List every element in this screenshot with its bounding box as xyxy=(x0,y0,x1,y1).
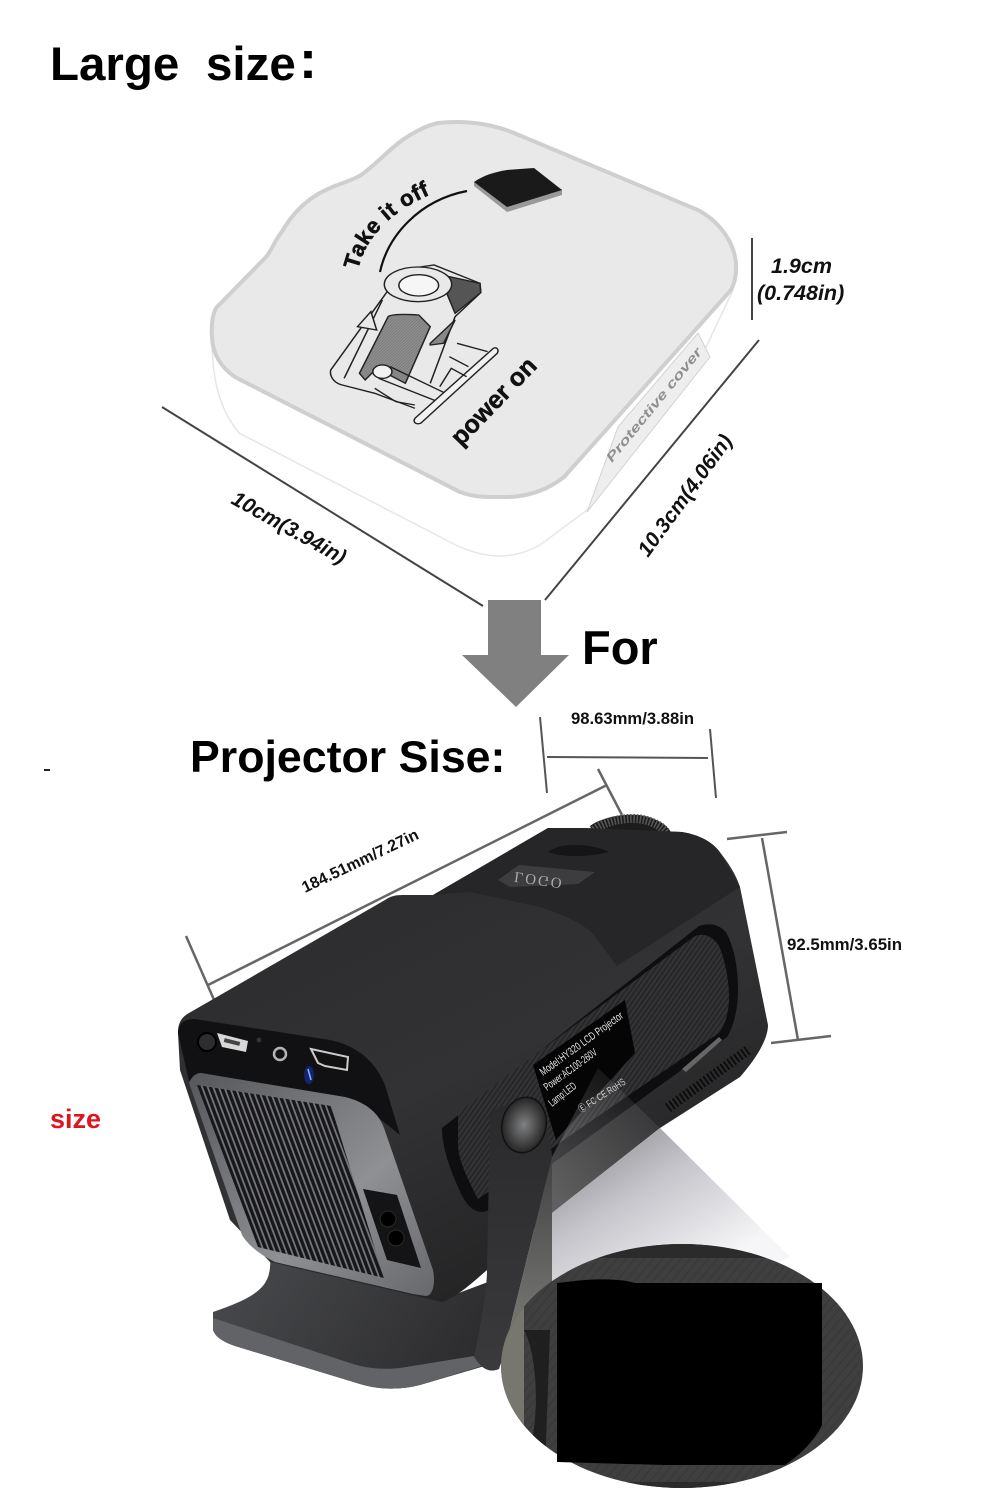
dimension: cover depth: 10.3cm(4.06in) xyxy=(633,430,737,561)
focus flap xyxy=(548,845,609,856)
light cone over body xyxy=(552,1068,660,1213)
spec label: Power:AC100-260V xyxy=(542,1046,600,1093)
dimension: projector length: 184.51mm/7.27in xyxy=(299,827,422,897)
projection beam xyxy=(552,1128,790,1300)
cover tab: protective cover label xyxy=(587,333,710,512)
cover top surface xyxy=(212,122,736,497)
title: Large size: Large xyxy=(50,38,179,91)
zoomed detail circle xyxy=(500,1240,870,1490)
dimension: projector height xyxy=(727,832,902,1043)
dimension: cover height: 1.9cm xyxy=(771,254,832,278)
cover lower body xyxy=(212,290,733,556)
body shoulder shade xyxy=(433,828,740,966)
light cone over arm xyxy=(502,1157,552,1400)
dimension: projector width xyxy=(540,710,716,798)
cover tab: protective cover label: Protective cover xyxy=(603,344,706,465)
stray dash xyxy=(44,769,50,771)
projector body xyxy=(178,828,768,1302)
grey rear panel xyxy=(189,1073,434,1296)
side speaker recess xyxy=(442,924,738,1212)
protective cover illustration xyxy=(210,120,738,557)
lower side strip xyxy=(682,1037,722,1072)
power socket xyxy=(363,1189,421,1268)
pivot knob xyxy=(497,1093,551,1157)
arrow: pointing down xyxy=(462,600,569,707)
logo plate xyxy=(498,865,595,891)
line drawing of projector xyxy=(330,265,498,424)
dimension: cover depth xyxy=(545,340,759,600)
logo plate: LOGO xyxy=(513,868,565,891)
ellipse details xyxy=(501,1244,766,1488)
label: power on: power on xyxy=(445,352,542,451)
spec label xyxy=(533,1000,635,1140)
spec label: Lamp:LED xyxy=(546,1080,579,1109)
stand base edge xyxy=(213,1318,495,1389)
title: Large size: : xyxy=(299,30,317,90)
rear vent slats xyxy=(197,1085,384,1278)
heading: Projector Sise: Projector Sise: xyxy=(190,733,505,782)
ports xyxy=(198,1033,348,1070)
spec label: Model:HY320 LCD Projector xyxy=(538,1010,626,1078)
heading: For: For xyxy=(582,621,658,674)
dimension: projector height: 92.5mm/3.65in xyxy=(787,936,902,954)
curved arrow line xyxy=(380,191,467,272)
port band xyxy=(178,1019,400,1135)
label: take it off: Take it off xyxy=(343,180,428,266)
dimension: cover width xyxy=(162,407,483,606)
dimension: cover width: 10cm(3.94in) xyxy=(228,487,350,569)
label: size: size xyxy=(50,1104,101,1134)
stand arm xyxy=(474,1105,552,1371)
side speaker grille xyxy=(458,935,729,1199)
dimension: cover height: (0.748in) xyxy=(757,281,844,305)
spec label: Ⓔ FC CE RoHS xyxy=(576,1076,628,1116)
stand base xyxy=(213,1255,520,1389)
dimension: projector width: 98.63mm/3.88in xyxy=(571,710,694,728)
lens barrel xyxy=(590,815,672,850)
black redaction block xyxy=(557,1279,822,1465)
title: Large size: size xyxy=(206,38,296,91)
side vents xyxy=(668,1050,748,1108)
icon: dark protective pad xyxy=(474,168,562,212)
projector illustration xyxy=(178,815,790,1400)
blue indicator light xyxy=(304,1066,314,1084)
ellipse background xyxy=(501,1244,863,1488)
dimension: cover height xyxy=(752,238,844,320)
dimension: projector length xyxy=(186,769,622,1018)
